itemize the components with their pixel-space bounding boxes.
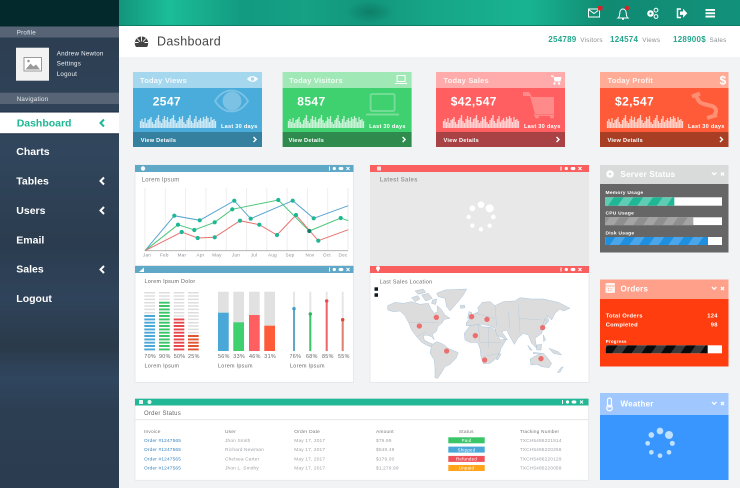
details link: View Details (444, 138, 479, 144)
row: refunded: Refunded (456, 457, 477, 462)
icon: large laptop (366, 94, 399, 116)
panel icon (377, 166, 381, 170)
icon: calendar (606, 283, 615, 293)
nav: tables: Tables (16, 176, 49, 188)
slider bars (290, 292, 350, 370)
row: unpaid: May 17, 2017 (294, 465, 325, 471)
spinner (466, 201, 496, 231)
row: paid (144, 437, 562, 444)
card: today sales (436, 72, 565, 147)
icon: small laptop (395, 76, 407, 84)
card: today views (133, 72, 262, 147)
details link: View Details (608, 138, 643, 144)
panel: weather (600, 393, 728, 480)
series: green (145, 200, 348, 251)
month axis: Jan (143, 252, 151, 258)
card title: Today Views (140, 76, 187, 85)
solid bars: 33% (233, 354, 245, 360)
panel title: Server Status (620, 170, 676, 179)
icon: bell (618, 6, 629, 20)
data points (172, 198, 343, 243)
row: unpaid: TXCH5486220058 (520, 465, 562, 471)
striped bars: 90% (159, 354, 171, 360)
header stats: 124574 (610, 35, 638, 44)
solid bars: 46% (249, 354, 261, 360)
icon: sign out (678, 9, 687, 18)
icon: gears (647, 8, 658, 18)
card title: Today Profit (608, 76, 653, 85)
striped bars: 70% (144, 354, 156, 360)
header stats: Visitors (580, 37, 603, 44)
details link: View Details (141, 138, 176, 144)
profile links (57, 50, 104, 78)
panel: sales map (370, 266, 589, 382)
row: paid: Order #1247565 (144, 438, 181, 444)
row: unpaid: $1,279.99 (376, 465, 399, 471)
table header (144, 429, 560, 435)
profile links: Logout (57, 71, 77, 78)
month axis (143, 252, 348, 258)
top bar (119, 0, 740, 26)
striped bars (144, 293, 200, 370)
month axis: Jun (232, 252, 240, 258)
header stats: 254789 (548, 35, 577, 44)
panel: latest sales (370, 165, 589, 266)
icon: small eye (247, 76, 258, 82)
order totals: Completed (606, 322, 638, 328)
solid bars: 31% (264, 354, 276, 360)
nav: email: Email (16, 234, 44, 246)
panel controls (712, 287, 724, 290)
disk usage: Disk Usage (606, 230, 634, 236)
map markers (417, 314, 545, 363)
period label: Last 30 days (221, 124, 258, 130)
icon: menu (706, 9, 715, 18)
striped bars: 25% (188, 354, 200, 360)
slider bars: Lorem Ipsum (290, 364, 325, 370)
month axis: May (212, 252, 222, 258)
table title: Order Status (144, 411, 181, 417)
header stats: Views (642, 37, 660, 44)
profile links: Andrew Newton (57, 50, 104, 58)
table header: Order Date (294, 429, 320, 435)
card title: Today Visitors (289, 76, 343, 85)
sparkline (288, 115, 364, 128)
panel: order status (135, 399, 588, 480)
row: refunded: Order #1247565 (144, 456, 181, 462)
panel icons (139, 400, 152, 404)
panel controls (329, 166, 350, 170)
sidebar (0, 0, 119, 488)
value: 8547 (297, 94, 326, 108)
row: refunded: May 17, 2017 (294, 456, 325, 462)
row: unpaid: Jhon L. Smithy (225, 465, 259, 471)
row: shipped (144, 447, 562, 453)
table header: Invoice (144, 429, 161, 435)
icon: large dollar (692, 94, 717, 118)
panel: orders (600, 280, 728, 366)
nav: logout: Logout (16, 293, 52, 305)
striped bars: Lorem Ipsum (144, 364, 179, 370)
chart title: Lorem Ipsum Dolor (144, 279, 195, 285)
sparkline (140, 115, 216, 128)
page header (119, 26, 740, 57)
row: shipped: Richard Newman (225, 447, 264, 453)
panel controls (712, 172, 724, 176)
period label: Last 30 days (524, 124, 561, 130)
sparkline (608, 115, 682, 128)
solid bars: Lorem Ipsum (218, 364, 253, 370)
panel controls (560, 268, 582, 272)
memory usage: Memory Usage (606, 190, 643, 196)
row: unpaid: Unpaid (459, 466, 475, 471)
panel controls (712, 402, 724, 405)
solid bars: 56% (218, 354, 230, 360)
map zoom buttons (374, 287, 378, 297)
slider bars: 85% (322, 354, 334, 360)
row: paid: $79.99 (376, 438, 392, 444)
panel: line chart (135, 165, 354, 266)
row: refunded: $179.00 (376, 456, 395, 462)
panel: bar charts (135, 266, 354, 382)
row: paid: TXCH5486221914 (520, 438, 562, 444)
order totals (606, 314, 718, 328)
row: unpaid: Order #1247565 (144, 465, 181, 471)
header stats: Sales (710, 37, 727, 44)
slider bars: 55% (338, 354, 350, 360)
profile label: Profile (17, 30, 36, 36)
month axis: Dec (339, 252, 348, 258)
order totals: 124 (707, 314, 718, 320)
period label: Last 30 days (688, 124, 725, 130)
row: paid: Jhon Smith (225, 438, 251, 444)
details link: View Details (289, 138, 324, 144)
navigation label: Navigation (17, 96, 49, 103)
table header: Status (459, 429, 474, 435)
line chart (143, 188, 348, 258)
panel title: Latest Sales (380, 178, 418, 184)
icon: small cart (551, 76, 562, 85)
panel icon (141, 166, 145, 171)
row: refunded: Chelsea Carter (225, 456, 260, 462)
icon: dashboard gauge (135, 36, 148, 47)
nav: users (16, 205, 104, 217)
nav: sales: Sales (16, 264, 44, 276)
row: shipped: Shipped (458, 447, 476, 452)
table header: Tracking Number (520, 429, 560, 435)
panel title: Weather (620, 400, 654, 408)
world map (388, 289, 570, 378)
icon: large cart (523, 92, 554, 118)
map title: Last Sales Location (380, 280, 432, 286)
striped bars: 50% (174, 354, 185, 360)
card: today visitors (283, 72, 412, 147)
nav: dashboard active: Dashboard (17, 118, 72, 130)
row: shipped: May 17, 2017 (294, 447, 325, 453)
month axis: Mar (178, 252, 187, 258)
panel controls (562, 400, 583, 404)
profile avatar (16, 48, 49, 81)
nav: charts: Charts (16, 146, 50, 158)
row: shipped: $549.49 (376, 447, 395, 453)
country borders (409, 305, 542, 357)
solid bars (218, 292, 276, 370)
panel title: Orders (620, 284, 649, 294)
panel icon (376, 266, 380, 272)
icon: gear (606, 170, 614, 178)
period label: Last 30 days (369, 124, 406, 130)
series: blue (145, 201, 348, 251)
cpu usage: CPU Usage (606, 210, 634, 216)
nav: tables (16, 176, 104, 188)
month axis: Feb (160, 252, 169, 258)
row: refunded (144, 456, 562, 462)
nav: sales (16, 264, 104, 276)
row: refunded: TXCH5486220129 (520, 456, 562, 462)
chart title: Lorem Ipsum (142, 178, 179, 184)
icon: thermometer (607, 398, 612, 411)
nav: users: Users (16, 205, 46, 217)
series: red (145, 215, 348, 251)
icon: mail (588, 6, 602, 17)
progress bar: Progress (606, 339, 627, 344)
value: $42,547 (451, 94, 497, 108)
nav: dashboard active (0, 112, 119, 134)
order totals: 98 (711, 322, 718, 328)
header stats: 128900$ (673, 35, 706, 44)
table header: User (225, 429, 236, 435)
row: paid: Paid (462, 438, 472, 443)
panel icon (139, 268, 144, 272)
value: 2547 (153, 94, 181, 108)
row: paid: May 17, 2017 (294, 438, 325, 444)
table header: Amount (376, 429, 394, 435)
month axis: Oct (323, 252, 331, 258)
icon: small dollar: $ (720, 74, 726, 88)
sparkline (444, 115, 518, 128)
row: shipped: TXCH5486220256 (520, 447, 562, 453)
panel controls (560, 166, 582, 170)
order totals: Total Orders (606, 314, 643, 320)
month axis: Aug (268, 252, 277, 258)
spinner (645, 428, 675, 458)
panel controls (329, 268, 350, 272)
month axis: Sep (286, 252, 295, 258)
profile links: Settings (57, 60, 81, 68)
month axis: Apr (197, 252, 205, 258)
slider bars: 68% (306, 354, 318, 360)
row: shipped: Order #1247565 (144, 447, 181, 453)
row: unpaid (144, 465, 562, 471)
panel: server status (600, 165, 728, 252)
value: $2,547 (615, 94, 654, 108)
card title: Today Sales (444, 76, 489, 85)
slider bars: 76% (290, 354, 301, 360)
month axis: Nov (306, 252, 315, 258)
heading: Dashboard (157, 34, 221, 48)
month axis: Jul (251, 252, 257, 258)
icon: large eye (215, 90, 248, 112)
card: today profit (600, 72, 728, 147)
header stats (548, 35, 727, 44)
